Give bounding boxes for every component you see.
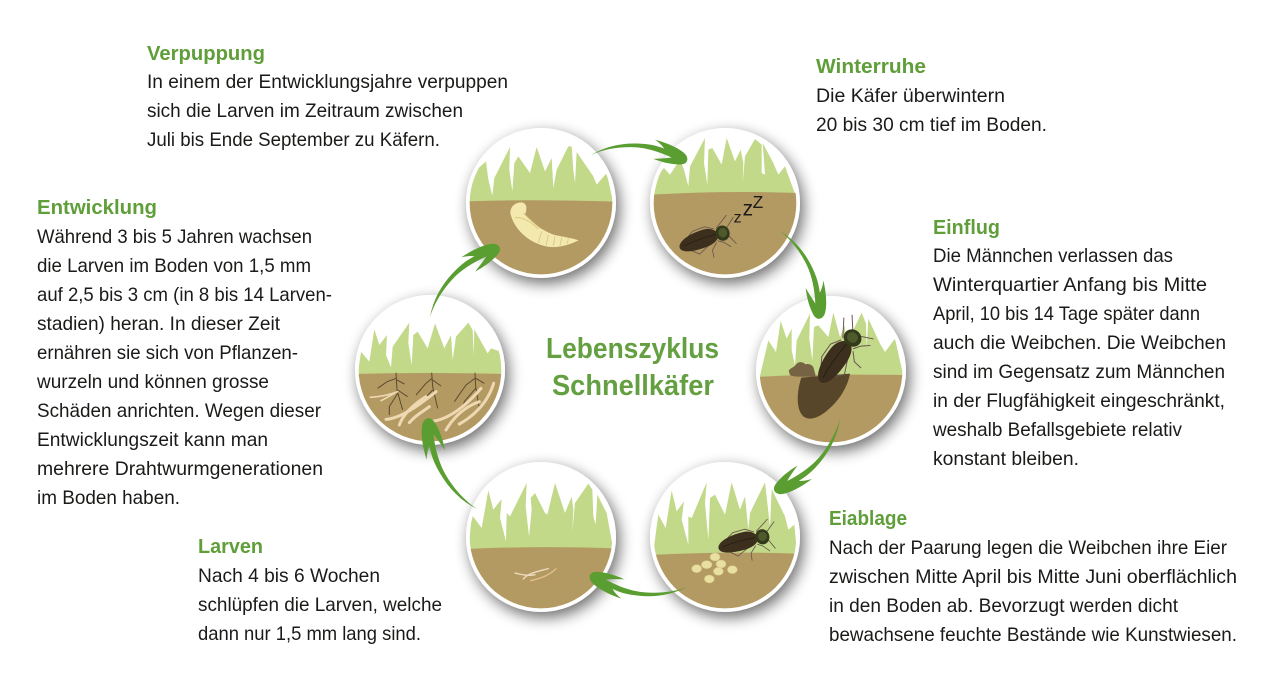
text block: Larven: dann nur 1,5 mm lang sind.: [198, 623, 421, 645]
text block: Eiablage: Nach der Paarung legen die Weibchen ihre Eier: [829, 537, 1227, 559]
panel: flight scene: [756, 296, 906, 446]
grass: [653, 482, 797, 556]
text block: Entwicklung: wurzeln und können grosse: [36, 371, 269, 393]
arrow: development to pupation: [417, 233, 502, 322]
soil: [652, 553, 798, 611]
text block: Entwicklung: [36, 196, 332, 509]
soil: [757, 375, 905, 445]
text block: Larven: [198, 535, 442, 645]
grass: [469, 146, 613, 203]
soil: [467, 200, 617, 278]
panel: winter rest scene: [650, 128, 800, 278]
arrow: winter rest to flight: [774, 223, 838, 321]
text block: Einflug: Einflug: [933, 216, 1000, 239]
arrow: larvae to development: [409, 416, 483, 518]
icon: beetle: [718, 518, 776, 561]
text block: Einflug: [932, 216, 1226, 470]
text block: Winterruhe: [816, 55, 1047, 136]
text block: Verpuppung: In einem der Entwicklungsjahre verpuppen: [147, 71, 508, 93]
soil: [356, 373, 504, 443]
text block: Winterruhe: Winterruhe: [816, 55, 926, 78]
panel: larvae scene: [466, 462, 617, 612]
icon: beetle emerging: [818, 314, 874, 383]
panel: egg laying scene: [650, 462, 800, 612]
text block: Eiablage: Eiablage: [829, 507, 907, 530]
soil: [467, 547, 617, 611]
icon: eggs: [692, 553, 737, 583]
text block: Entwicklung: Entwicklung: [37, 196, 157, 219]
icon: sleep letters: [734, 196, 763, 222]
arrow: pupation to winter rest: [591, 138, 688, 165]
text block: Einflug: sind im Gegensatz zum Männchen: [933, 361, 1225, 383]
text block: Einflug: in der Flugfähigkeit eingeschränkt,: [933, 390, 1225, 412]
text block: Einflug: konstant bleiben.: [933, 448, 1079, 470]
text block: Einflug: weshalb Befallsgebiete relativ: [932, 419, 1182, 441]
text block: Verpuppung: [147, 42, 508, 151]
icon: sleep letters: z: [734, 209, 742, 226]
text block: Winterruhe: 20 bis 30 cm tief im Boden.: [816, 114, 1047, 136]
title: [546, 333, 719, 402]
panel: development scene: [355, 295, 505, 445]
text block: Einflug: auch die Weibchen. Die Weibchen: [933, 332, 1226, 354]
title: Schnellkäfer: [552, 370, 714, 402]
text block: Entwicklung: im Boden haben.: [37, 487, 180, 509]
text block: Entwicklung: ernähren sie sich von Pflanzen-: [37, 342, 298, 364]
text block: Eiablage: [829, 507, 1237, 646]
arrow: egg laying to larvae: [588, 571, 688, 604]
text block: Entwicklung: Während 3 bis 5 Jahren wachsen: [37, 226, 312, 248]
burrow: [798, 374, 850, 419]
text block: Winterruhe: Die Käfer überwintern: [816, 85, 1005, 107]
panel: pupation scene: [466, 128, 617, 278]
icon: wireworm larvae: [370, 383, 494, 430]
soil mound: [789, 362, 815, 377]
icon: roots: [378, 373, 484, 415]
text block: Larven: schlüpfen die Larven, welche: [198, 594, 442, 616]
grass: [653, 138, 796, 196]
text block: Entwicklung: Entwicklungszeit kann man: [37, 429, 268, 451]
text block: Einflug: April, 10 bis 14 Tage später dann: [933, 303, 1200, 325]
text block: Entwicklung: auf 2,5 bis 3 cm (in 8 bis 14 Larven-: [37, 284, 332, 306]
text block: Eiablage: bewachsene feuchte Bestände wie Kunstwiesen.: [829, 624, 1237, 646]
icon: sleeping beetle: [680, 214, 737, 258]
text block: Eiablage: in den Boden ab. Bevorzugt werden dicht: [829, 595, 1179, 617]
text block: Larven: Larven: [198, 535, 263, 558]
text block: Eiablage: zwischen Mitte April bis Mitte Juni oberflächlich: [829, 566, 1237, 588]
text block: Verpuppung: sich die Larven im Zeitraum zwischen: [147, 100, 463, 122]
text block: Verpuppung: Juli bis Ende September zu Käfern.: [147, 129, 440, 151]
text block: Entwicklung: Schäden anrichten. Wegen dieser: [37, 400, 321, 422]
icon: sleep letters: z: [743, 198, 753, 221]
title: Lebenszyklus: [546, 333, 719, 365]
text block: Entwicklung: die Larven im Boden von 1,5 mm: [37, 255, 311, 277]
grass: [358, 323, 503, 375]
icon: sleep letters: Z: [753, 192, 764, 212]
text block: Entwicklung: mehrere Drahtwurmgenerationen: [37, 458, 323, 480]
text block: Entwicklung: stadien) heran. In dieser Zeit: [37, 313, 281, 335]
text block: Einflug: Winterquartier Anfang bis Mitte: [933, 274, 1207, 296]
text block: Larven: Nach 4 bis 6 Wochen: [198, 565, 380, 587]
grass: [759, 313, 904, 379]
icon: pupa: [510, 202, 579, 247]
grass: [469, 483, 613, 550]
text block: Einflug: Die Männchen verlassen das: [933, 245, 1173, 267]
text block: Verpuppung: Verpuppung: [147, 42, 265, 65]
arrow: flight to egg laying: [771, 414, 854, 505]
icon: young larvae: [515, 569, 556, 581]
soil: [652, 192, 798, 278]
